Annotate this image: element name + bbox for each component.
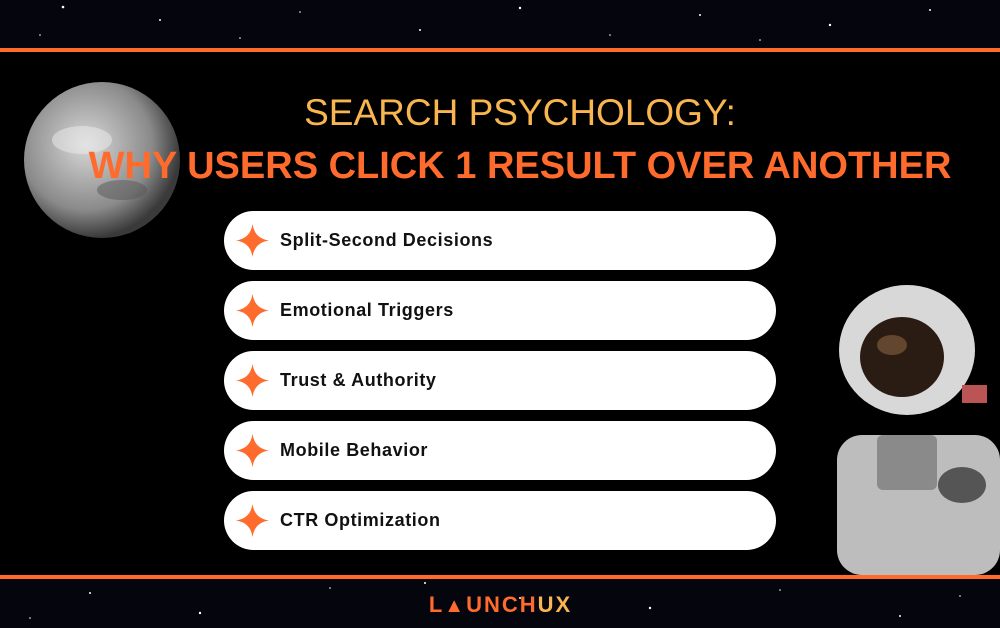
title bbox=[88, 92, 951, 187]
pill 3: Trust & Authority bbox=[280, 370, 437, 390]
pill 1: Split-Second Decisions bbox=[280, 230, 493, 250]
pill 4: Mobile Behavior bbox=[280, 440, 428, 460]
pill 1 bbox=[224, 211, 776, 270]
icon: astronaut bbox=[837, 285, 1000, 575]
starfield top bbox=[0, 0, 1000, 48]
pill 5: CTR Optimization bbox=[280, 510, 441, 530]
icon: star bbox=[236, 504, 269, 537]
pill 2 bbox=[224, 281, 776, 340]
pill 2: Emotional Triggers bbox=[280, 300, 454, 320]
pill 4 bbox=[224, 421, 776, 480]
title line 2: WHY USERS CLICK 1 RESULT OVER ANOTHER bbox=[89, 145, 951, 187]
pill 3 bbox=[224, 351, 776, 410]
icon: star bbox=[236, 224, 269, 257]
top border bbox=[0, 48, 1000, 52]
icon: earth bbox=[24, 82, 180, 238]
logo: L▲UNCHUX bbox=[429, 592, 572, 617]
icon: star bbox=[236, 294, 269, 327]
icon: star bbox=[236, 434, 269, 467]
bottom border bbox=[0, 575, 1000, 579]
title line 1: SEARCH PSYCHOLOGY: bbox=[304, 92, 736, 133]
starfield bottom bbox=[0, 578, 1000, 628]
pill 5 bbox=[224, 491, 776, 550]
icon: star bbox=[236, 364, 269, 397]
